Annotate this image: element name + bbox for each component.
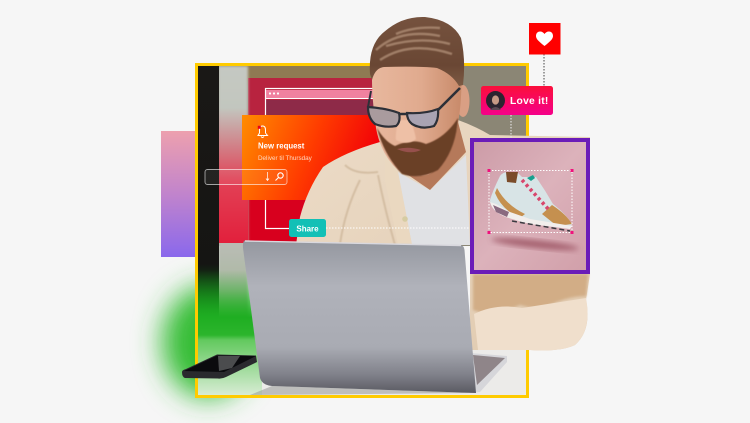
love it badge xyxy=(481,86,553,115)
notification subtext: Deliver til Thursday xyxy=(258,155,313,162)
glasses xyxy=(368,88,460,128)
ear xyxy=(456,85,470,117)
purple gradient panel xyxy=(161,131,197,257)
laptop xyxy=(243,240,507,395)
search box xyxy=(205,170,287,184)
notification heading: New request xyxy=(258,142,305,150)
dotted connector: share to product xyxy=(326,227,471,229)
green glow xyxy=(162,286,254,398)
icon: bell xyxy=(258,126,268,138)
product card xyxy=(472,140,588,272)
share button xyxy=(289,219,326,237)
base shadow xyxy=(250,386,476,395)
hair xyxy=(370,17,464,86)
dotted connector: heart to love it xyxy=(543,54,545,87)
beard xyxy=(377,118,458,176)
neck xyxy=(398,122,466,190)
phone xyxy=(182,354,257,379)
shoe shadow xyxy=(491,235,579,253)
browser window outline xyxy=(265,88,386,228)
dotted connector: love it to product xyxy=(510,115,512,139)
man: head xyxy=(368,17,470,190)
laptop base xyxy=(470,353,507,393)
icon: magnifier xyxy=(276,173,283,180)
illustration: man at laptop with interface cards xyxy=(139,17,590,420)
mouth xyxy=(397,148,421,152)
white t-shirt xyxy=(398,155,470,245)
yellow frame xyxy=(196,64,528,396)
photo background inside frame xyxy=(198,60,526,395)
nose xyxy=(396,120,416,143)
love it badge: Love it! xyxy=(510,96,549,107)
avatar xyxy=(486,91,505,110)
shoe xyxy=(490,172,572,231)
heart badge xyxy=(529,23,560,54)
laptop lid xyxy=(243,240,476,393)
selection box xyxy=(488,169,574,234)
share button: Share xyxy=(296,224,319,234)
icon: heart xyxy=(536,32,553,46)
face xyxy=(372,60,462,176)
notification card xyxy=(242,115,382,200)
man: shirt xyxy=(296,120,590,350)
